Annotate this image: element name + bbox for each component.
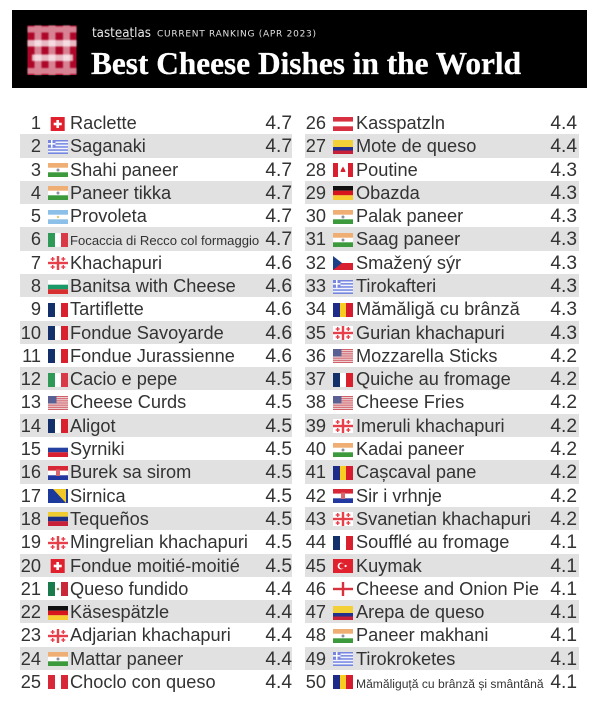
row 32 Smažený sýr: Smažený sýr bbox=[356, 253, 461, 273]
row 30 Palak paneer: 4.3 bbox=[550, 206, 577, 227]
row 24 Mattar paneer: 24 bbox=[21, 649, 41, 669]
row 9 Tartiflette: 9 bbox=[31, 299, 41, 319]
row 25 Choclo con queso: 25 bbox=[21, 672, 41, 692]
row 25 Choclo con queso bbox=[21, 672, 292, 693]
row 25 Choclo con queso: Choclo con queso bbox=[70, 672, 216, 692]
row 21 Queso fundido bbox=[21, 579, 292, 600]
row 26 Kasspatzln: 26 bbox=[306, 113, 326, 133]
row 13 Cheese Curds: Cheese Curds bbox=[70, 392, 186, 412]
row 45 Kuymak: 45 bbox=[306, 556, 326, 576]
row 37 Quiche au fromage: 4.2 bbox=[550, 369, 577, 390]
row 17 Sirnica bbox=[21, 486, 292, 507]
row 7 Khachapuri: Khachapuri bbox=[70, 253, 162, 273]
row 5 Provoleta bbox=[31, 206, 292, 227]
row 39 Imeruli khachapuri: 4.2 bbox=[550, 416, 577, 437]
row 29 Obazda: Obazda bbox=[356, 183, 420, 203]
row 41 Cașcaval pane: 4.2 bbox=[550, 462, 577, 483]
row 21 Queso fundido: 4.4 bbox=[265, 579, 292, 600]
row 19 Mingrelian khachapuri: Mingrelian khachapuri bbox=[70, 532, 248, 552]
row 40 Kadai paneer: Kadai paneer bbox=[356, 439, 464, 459]
row 2 Saganaki: 4.7 bbox=[265, 136, 292, 157]
row 13 Cheese Curds: 13 bbox=[21, 392, 41, 412]
subtitle: current ranking: CURRENT RANKING (APR 2023) bbox=[157, 30, 316, 40]
row 33 Tirokafteri: 33 bbox=[306, 276, 326, 296]
row 21 Queso fundido: Queso fundido bbox=[70, 579, 188, 599]
row 20 Fondue moitié-moitié: Fondue moitié-moitié bbox=[70, 556, 240, 576]
row 17 Sirnica: 17 bbox=[21, 486, 41, 506]
row 26 Kasspatzln: 4.4 bbox=[550, 113, 577, 134]
row 16 Burek sa sirom bbox=[20, 460, 292, 484]
row 28 Poutine: 28 bbox=[306, 160, 326, 180]
row 33 Tirokafteri: Tirokafteri bbox=[356, 276, 436, 296]
row 7 Khachapuri bbox=[31, 253, 292, 274]
row 25 Choclo con queso: 4.4 bbox=[265, 672, 292, 693]
row 43 Svanetian khachapuri: 43 bbox=[306, 509, 326, 529]
row 38 Cheese Fries: 38 bbox=[306, 392, 326, 412]
row 38 Cheese Fries bbox=[306, 392, 577, 413]
row 1 Raclette: 4.7 bbox=[265, 113, 292, 134]
row 15 Syrniki: 15 bbox=[21, 439, 41, 459]
row 23 Adjarian khachapuri: 4.4 bbox=[265, 625, 292, 646]
row 30 Palak paneer bbox=[306, 206, 577, 227]
row 12 Cacio e pepe: 12 bbox=[21, 369, 41, 389]
row 35 Gurian khachapuri: Gurian khachapuri bbox=[356, 323, 505, 343]
row 46 Cheese and Onion Pie bbox=[306, 579, 577, 600]
row 31 Saag paneer bbox=[305, 227, 579, 251]
row 14 Aligot: Aligot bbox=[70, 416, 116, 436]
row 22 Käsespätzle: Käsespätzle bbox=[70, 602, 169, 622]
row 48 Paneer makhani: 48 bbox=[306, 625, 326, 645]
brand name: tasteatlas bbox=[92, 26, 151, 41]
row 32 Smažený sýr bbox=[306, 253, 577, 274]
row 6 Focaccia di Recco col formaggio: 4.7 bbox=[265, 229, 292, 250]
row 34 Mămăligă cu brânză: Mămăligă cu brânză bbox=[356, 299, 520, 319]
row 35 Gurian khachapuri bbox=[305, 321, 579, 344]
row 32 Smažený sýr: 32 bbox=[306, 253, 326, 273]
row 49 Tirokroketes: 4.1 bbox=[550, 649, 577, 670]
row 3 Shahi paneer: 3 bbox=[31, 160, 41, 180]
row 45 Kuymak: Kuymak bbox=[356, 556, 422, 576]
row 18 Tequeños: 4.5 bbox=[265, 509, 292, 530]
row 6 Focaccia di Recco col formaggio: Focaccia di Recco col formaggio bbox=[70, 233, 259, 248]
row 24 Mattar paneer bbox=[20, 647, 292, 670]
row 27 Mote de queso: 4.4 bbox=[550, 136, 577, 157]
row 9 Tartiflette: Tartiflette bbox=[70, 299, 144, 319]
row 27 Mote de queso: Mote de queso bbox=[356, 136, 476, 156]
row 22 Käsespätzle bbox=[20, 600, 292, 623]
row 11 Fondue Jurassienne: 11 bbox=[22, 346, 41, 366]
header banner bbox=[12, 10, 587, 88]
row 9 Tartiflette bbox=[31, 299, 292, 320]
row 20 Fondue moitié-moitié bbox=[20, 554, 292, 577]
row 2 Saganaki: 2 bbox=[31, 136, 41, 156]
row 6 Focaccia di Recco col formaggio: 6 bbox=[31, 229, 41, 249]
row 22 Käsespätzle: 22 bbox=[21, 602, 41, 622]
row 31 Saag paneer: 31 bbox=[306, 229, 326, 249]
row 39 Imeruli khachapuri bbox=[305, 414, 579, 437]
row 3 Shahi paneer: Shahi paneer bbox=[70, 160, 178, 180]
row 2 Saganaki bbox=[20, 134, 292, 158]
row 43 Svanetian khachapuri: 4.2 bbox=[550, 509, 577, 530]
row 43 Svanetian khachapuri: Svanetian khachapuri bbox=[356, 509, 531, 529]
row 45 Kuymak bbox=[305, 554, 579, 577]
row 17 Sirnica: Sirnica bbox=[70, 486, 126, 506]
row 13 Cheese Curds bbox=[21, 392, 292, 413]
row 33 Tirokafteri bbox=[305, 274, 579, 297]
row 36 Mozzarella Sticks: 4.2 bbox=[550, 346, 577, 367]
row 24 Mattar paneer: Mattar paneer bbox=[70, 649, 183, 669]
row 8 Banitsa with Cheese bbox=[20, 274, 292, 297]
row 4 Paneer tikka: 4.7 bbox=[265, 183, 292, 204]
row 17 Sirnica: 4.5 bbox=[265, 486, 292, 507]
row 44 Soufflé au fromage bbox=[306, 532, 577, 553]
row 46 Cheese and Onion Pie: 46 bbox=[306, 579, 326, 599]
title: Best Cheese Dishes in the World bbox=[91, 45, 521, 81]
row 50 Mămăliguță cu brânză și smântână: Mămăliguță cu brânză și smântână bbox=[356, 677, 544, 691]
row 33 Tirokafteri: 4.3 bbox=[550, 276, 577, 297]
row 36 Mozzarella Sticks: Mozzarella Sticks bbox=[356, 346, 498, 366]
row 40 Kadai paneer: 40 bbox=[306, 439, 326, 459]
row 37 Quiche au fromage bbox=[305, 367, 579, 390]
row 36 Mozzarella Sticks bbox=[306, 346, 577, 367]
row 28 Poutine: Poutine bbox=[356, 160, 418, 180]
row 19 Mingrelian khachapuri bbox=[21, 532, 292, 553]
row 34 Mămăligă cu brânză: 4.3 bbox=[550, 299, 577, 320]
row 7 Khachapuri: 4.6 bbox=[265, 253, 292, 274]
row 14 Aligot bbox=[20, 414, 292, 437]
row 27 Mote de queso bbox=[305, 134, 579, 158]
row 47 Arepa de queso: Arepa de queso bbox=[356, 602, 484, 622]
row 4 Paneer tikka bbox=[20, 181, 292, 204]
row 12 Cacio e pepe: 4.5 bbox=[265, 369, 292, 390]
row 20 Fondue moitié-moitié: 4.5 bbox=[265, 556, 292, 576]
row 27 Mote de queso: 27 bbox=[306, 136, 326, 156]
row 50 Mămăliguță cu brânză și smântână: 4.1 bbox=[550, 672, 577, 693]
row 10 Fondue Savoyarde: Fondue Savoyarde bbox=[70, 323, 224, 343]
row 18 Tequeños bbox=[20, 507, 292, 530]
row 37 Quiche au fromage: 37 bbox=[306, 369, 326, 389]
row 10 Fondue Savoyarde: 10 bbox=[21, 323, 41, 343]
row 31 Saag paneer: 4.3 bbox=[550, 229, 577, 250]
row 18 Tequeños: 18 bbox=[21, 509, 41, 529]
row 41 Cașcaval pane: 41 bbox=[306, 462, 326, 482]
row 46 Cheese and Onion Pie: Cheese and Onion Pie bbox=[356, 579, 539, 599]
row 38 Cheese Fries: Cheese Fries bbox=[356, 392, 464, 412]
panel: ranks 26 to 50 bbox=[305, 113, 579, 693]
row 35 Gurian khachapuri: 35 bbox=[306, 323, 326, 343]
row 44 Soufflé au fromage: 44 bbox=[306, 532, 326, 552]
row 43 Svanetian khachapuri bbox=[305, 507, 579, 530]
row 48 Paneer makhani: Paneer makhani bbox=[356, 625, 488, 645]
row 6 Focaccia di Recco col formaggio bbox=[20, 227, 292, 251]
row 8 Banitsa with Cheese: 8 bbox=[31, 276, 41, 296]
row 1 Raclette bbox=[31, 113, 292, 134]
row 41 Cașcaval pane bbox=[305, 460, 579, 484]
row 48 Paneer makhani: 4.1 bbox=[550, 625, 577, 646]
row 7 Khachapuri: 7 bbox=[31, 253, 41, 273]
row 49 Tirokroketes bbox=[305, 647, 579, 670]
row 50 Mămăliguță cu brânză și smântână: 50 bbox=[306, 672, 326, 692]
row 9 Tartiflette: 4.6 bbox=[265, 299, 292, 320]
row 15 Syrniki: 4.5 bbox=[265, 439, 292, 460]
row 42 Sir i vrhnje: 42 bbox=[306, 486, 326, 506]
row 10 Fondue Savoyarde: 4.6 bbox=[265, 323, 292, 344]
row 12 Cacio e pepe: Cacio e pepe bbox=[70, 369, 177, 389]
row 3 Shahi paneer bbox=[31, 160, 292, 181]
row 24 Mattar paneer: 4.4 bbox=[265, 649, 292, 670]
row 44 Soufflé au fromage: Soufflé au fromage bbox=[356, 532, 509, 552]
row 16 Burek sa sirom: 4.5 bbox=[265, 462, 292, 483]
row 38 Cheese Fries: 4.2 bbox=[550, 392, 577, 413]
row 37 Quiche au fromage: Quiche au fromage bbox=[356, 369, 511, 389]
row 34 Mămăligă cu brânză bbox=[306, 299, 577, 320]
panel: ranks 1 to 25 bbox=[20, 113, 292, 693]
row 1 Raclette: 1 bbox=[31, 113, 41, 133]
row 31 Saag paneer: Saag paneer bbox=[356, 229, 460, 249]
row 11 Fondue Jurassienne: 4.6 bbox=[265, 346, 292, 367]
row 26 Kasspatzln: Kasspatzln bbox=[356, 113, 445, 133]
row 40 Kadai paneer: 4.2 bbox=[550, 439, 577, 460]
row 47 Arepa de queso bbox=[305, 600, 579, 623]
row 49 Tirokroketes: Tirokroketes bbox=[356, 649, 455, 669]
row 4 Paneer tikka: 4 bbox=[31, 183, 41, 203]
row 49 Tirokroketes: 49 bbox=[306, 649, 326, 669]
row 29 Obazda: 29 bbox=[306, 183, 326, 203]
row 1 Raclette: Raclette bbox=[70, 113, 137, 133]
row 18 Tequeños: Tequeños bbox=[70, 509, 149, 529]
row 46 Cheese and Onion Pie: 4.1 bbox=[550, 579, 577, 600]
row 29 Obazda: 4.3 bbox=[550, 183, 577, 204]
row 34 Mămăligă cu brânză: 34 bbox=[306, 299, 326, 319]
row 20 Fondue moitié-moitié: 20 bbox=[21, 556, 41, 576]
icon: gingham tablecloth logo bbox=[28, 26, 76, 75]
row 19 Mingrelian khachapuri: 19 bbox=[21, 532, 41, 552]
row 5 Provoleta: Provoleta bbox=[70, 206, 147, 226]
row 40 Kadai paneer bbox=[306, 439, 577, 460]
row 14 Aligot: 14 bbox=[21, 416, 41, 436]
row 5 Provoleta: 4.7 bbox=[265, 206, 292, 227]
row 16 Burek sa sirom: Burek sa sirom bbox=[70, 462, 191, 482]
row 32 Smažený sýr: 4.3 bbox=[550, 253, 577, 274]
row 19 Mingrelian khachapuri: 4.5 bbox=[265, 532, 292, 553]
row 28 Poutine: 4.3 bbox=[550, 160, 577, 181]
row 44 Soufflé au fromage: 4.1 bbox=[550, 532, 577, 553]
row 30 Palak paneer: Palak paneer bbox=[356, 206, 463, 226]
row 5 Provoleta: 5 bbox=[31, 206, 41, 226]
row 42 Sir i vrhnje: 4.2 bbox=[550, 486, 577, 507]
row 47 Arepa de queso: 4.1 bbox=[550, 602, 577, 623]
row 10 Fondue Savoyarde bbox=[20, 321, 292, 344]
row 23 Adjarian khachapuri bbox=[21, 625, 292, 646]
row 36 Mozzarella Sticks: 36 bbox=[306, 346, 326, 366]
row 45 Kuymak: 4.1 bbox=[550, 556, 577, 576]
row 50 Mămăliguță cu brânză și smântână bbox=[306, 672, 577, 693]
row 8 Banitsa with Cheese: 4.6 bbox=[265, 276, 292, 297]
row 3 Shahi paneer: 4.7 bbox=[265, 160, 292, 181]
row 39 Imeruli khachapuri: 39 bbox=[306, 416, 326, 436]
row 35 Gurian khachapuri: 4.3 bbox=[550, 323, 577, 344]
row 28 Poutine bbox=[306, 160, 577, 181]
row 26 Kasspatzln bbox=[306, 113, 577, 134]
row 11 Fondue Jurassienne: Fondue Jurassienne bbox=[70, 346, 235, 366]
row 4 Paneer tikka: Paneer tikka bbox=[70, 183, 171, 203]
row 42 Sir i vrhnje: Sir i vrhnje bbox=[356, 486, 442, 506]
row 23 Adjarian khachapuri: Adjarian khachapuri bbox=[70, 625, 231, 645]
row 48 Paneer makhani bbox=[306, 625, 577, 646]
row 14 Aligot: 4.5 bbox=[265, 416, 292, 437]
row 41 Cașcaval pane: Cașcaval pane bbox=[356, 462, 476, 482]
row 16 Burek sa sirom: 16 bbox=[21, 462, 41, 482]
row 42 Sir i vrhnje bbox=[306, 486, 577, 507]
row 15 Syrniki: Syrniki bbox=[70, 439, 125, 459]
row 22 Käsespätzle: 4.4 bbox=[265, 602, 292, 623]
row 21 Queso fundido: 21 bbox=[21, 579, 41, 599]
row 2 Saganaki: Saganaki bbox=[70, 136, 146, 156]
row 23 Adjarian khachapuri: 23 bbox=[21, 625, 41, 645]
row 8 Banitsa with Cheese: Banitsa with Cheese bbox=[70, 276, 236, 296]
row 29 Obazda bbox=[305, 181, 579, 204]
row 39 Imeruli khachapuri: Imeruli khachapuri bbox=[356, 416, 505, 436]
row 30 Palak paneer: 30 bbox=[306, 206, 326, 226]
row 12 Cacio e pepe bbox=[20, 367, 292, 390]
row 13 Cheese Curds: 4.5 bbox=[265, 392, 292, 413]
row 15 Syrniki bbox=[21, 439, 292, 460]
row 47 Arepa de queso: 47 bbox=[306, 602, 326, 622]
row 11 Fondue Jurassienne bbox=[22, 346, 292, 367]
